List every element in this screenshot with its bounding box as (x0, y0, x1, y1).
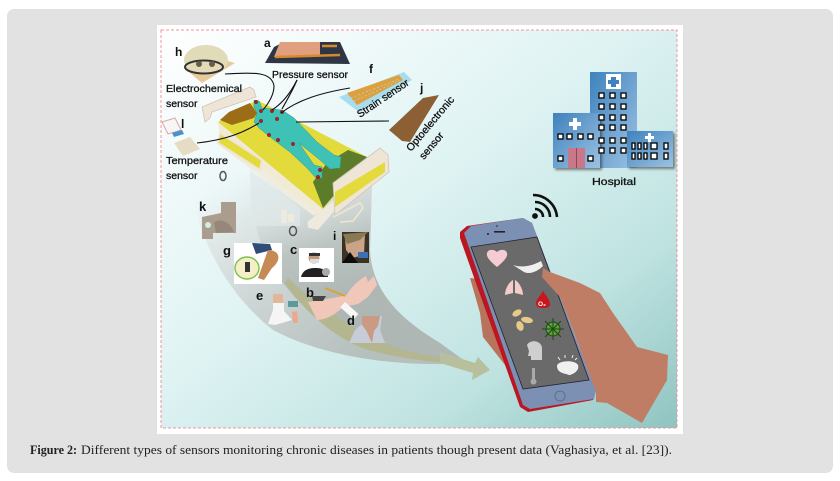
label optoelectronic sensor: Optoelectronic (404, 94, 457, 154)
sensor a (265, 42, 350, 64)
windows (558, 93, 668, 161)
icon wing (513, 261, 543, 273)
icon heart (487, 250, 507, 267)
foot shadow (313, 150, 367, 208)
arrow tip (440, 352, 490, 380)
mattress side (218, 122, 323, 217)
label j: j (419, 81, 423, 95)
label i: i (333, 229, 336, 243)
door (568, 148, 585, 168)
label temperature sensor: Temperature (166, 155, 228, 167)
label electrochemical sensor (166, 83, 242, 110)
photo k (202, 202, 236, 239)
phone (460, 218, 596, 412)
sensor l (162, 118, 200, 156)
photo e sock (268, 294, 298, 325)
phone red case (460, 218, 595, 412)
icon oxygen drop (536, 291, 550, 308)
icon brain (557, 355, 578, 375)
patient body (254, 100, 341, 178)
bed legs (281, 210, 294, 223)
hospital left wing (553, 113, 600, 168)
photo b arm (308, 276, 377, 320)
head board (202, 87, 256, 122)
sensor f (339, 72, 412, 112)
bed side frame (220, 135, 323, 221)
label optoelectronic sensor: sensor (417, 130, 447, 162)
mattress (218, 100, 367, 209)
translucent under-bed panel (250, 170, 300, 226)
phone body (464, 218, 596, 409)
holding hand (542, 268, 668, 423)
foot board panel (335, 162, 385, 207)
tower cross (606, 74, 621, 89)
figure card (157, 25, 683, 434)
hospital (553, 72, 673, 168)
leader lines (197, 73, 389, 143)
sensor dots (254, 100, 322, 179)
label temperature sensor (166, 155, 228, 182)
bed (202, 87, 389, 236)
label l: l (181, 117, 184, 131)
icon virus (542, 318, 564, 340)
label d: d (347, 313, 355, 328)
photo i (342, 232, 369, 263)
photo c (299, 248, 334, 282)
wifi icon (533, 195, 557, 218)
hospital label: Hospital (592, 176, 636, 188)
caption: Figure 2: (30, 443, 77, 457)
swoosh from bed to phone (190, 170, 490, 380)
caption: Different types of sensors monitoring chronic diseases in patients though present data (Vaghasiya, et al. [23]). (81, 443, 672, 457)
label temperature sensor: sensor (166, 170, 198, 182)
label strain sensor: Strain sensor (355, 77, 412, 120)
foot leg (307, 197, 338, 230)
home button (555, 391, 565, 401)
sensor j (389, 95, 439, 142)
icon head (527, 341, 542, 360)
right wing cross (645, 133, 654, 142)
label h: h (175, 45, 182, 59)
foot rail loop (333, 203, 363, 222)
label g: g (223, 243, 231, 258)
phone screen (471, 237, 589, 389)
photo g (234, 243, 282, 284)
side rail (218, 133, 262, 170)
label b: b (306, 285, 314, 300)
back fingers (470, 278, 515, 365)
icon lungs (505, 280, 523, 295)
left wing cross (569, 118, 581, 130)
hospital tower (590, 72, 637, 168)
icon oxygen drop: O₂ (538, 301, 546, 308)
hospital right wing (627, 131, 673, 167)
label electrochemical sensor: Electrochemical (166, 83, 242, 95)
photo d neck (349, 316, 385, 343)
icon seeds (511, 308, 533, 332)
icon thermometer (530, 368, 537, 385)
figure background (161, 30, 677, 428)
label pressure sensor: Pressure sensor (272, 69, 348, 81)
label a: a (264, 36, 271, 50)
label electrochemical sensor: sensor (166, 98, 198, 110)
foot board (333, 148, 389, 215)
speaker (487, 225, 505, 235)
pillow (220, 103, 257, 125)
label k: k (199, 199, 207, 214)
label c: c (290, 242, 297, 257)
label f: f (369, 62, 374, 76)
label e: e (256, 288, 263, 303)
sensor h (184, 45, 235, 83)
wheels (220, 172, 296, 236)
